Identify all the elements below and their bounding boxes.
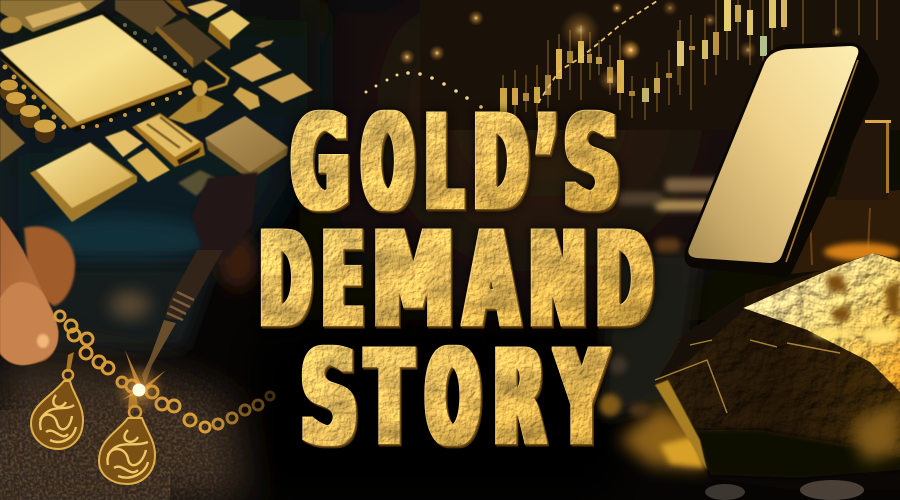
candle wicks — [503, 0, 877, 120]
board surface — [0, 0, 320, 265]
nugget shadow base — [692, 430, 900, 490]
title line: GOLD'S: O — [362, 86, 414, 240]
second finger — [24, 226, 75, 306]
pendant: left — [31, 352, 83, 449]
component: contact pads — [2, 64, 182, 130]
component: small square chips — [105, 130, 170, 182]
background: upper market base — [420, 0, 900, 130]
thumb — [0, 216, 58, 365]
bokeh lights — [399, 0, 843, 92]
workbench base — [0, 410, 170, 500]
component: large lower chip — [30, 142, 137, 222]
title line: GOLD'S: G — [292, 86, 349, 240]
workbench surface — [0, 352, 250, 500]
panel: circuit board — [0, 0, 320, 265]
title line: STORY: S — [301, 322, 358, 474]
title line: STORY: O — [426, 322, 480, 474]
nugget body — [655, 253, 900, 470]
panel: gold nugget — [599, 243, 900, 500]
tool needle — [142, 320, 176, 385]
bar behind lower — [780, 190, 900, 275]
title line: DEMAND: N — [530, 204, 586, 356]
nugget rim glow — [824, 243, 900, 261]
blurred coins — [617, 178, 720, 252]
component: metal square chip — [205, 116, 288, 180]
background: right ground — [600, 250, 700, 420]
ground hot light — [660, 436, 706, 468]
title line: STORY: R — [494, 322, 544, 474]
main bar side — [684, 43, 879, 277]
tool ribbed collar — [167, 292, 194, 320]
title line: GOLD'S: L — [426, 86, 462, 240]
candle bodies — [500, 0, 787, 112]
icon: solder spark — [113, 350, 166, 415]
nugget cracks — [655, 340, 840, 413]
ground blurred stones — [599, 356, 651, 417]
title line: DEMAND: A — [465, 204, 518, 356]
main bar lit edge — [786, 60, 858, 262]
title line: STORY: Y — [556, 322, 607, 474]
component: heat sinks — [115, 0, 222, 68]
nail highlight — [37, 334, 49, 348]
background: foreground darkening under title — [250, 330, 620, 500]
bar behind lit edges — [810, 120, 891, 265]
component: upper pads row — [123, 23, 187, 73]
pendant: right — [99, 392, 155, 484]
nugget dark crevices — [826, 274, 900, 322]
chart: candlestick market — [364, 0, 877, 120]
nugget left dark shoulder — [656, 295, 745, 382]
title line: DEMAND: E — [323, 204, 363, 356]
text mark on board — [178, 170, 216, 196]
component: gold cubes — [165, 0, 250, 50]
blurred warm reflection — [110, 291, 150, 319]
component: crystal oscillator — [132, 113, 205, 167]
trend line rising — [538, 1, 657, 103]
component: top left connector — [0, 0, 105, 33]
workbench grit — [0, 377, 240, 500]
title line: DEMAND: D — [260, 204, 311, 356]
component: right flat chips — [230, 40, 313, 110]
workbench backdrop — [0, 265, 215, 350]
nugget hot highlights — [813, 327, 898, 343]
tool upper body — [192, 172, 258, 258]
title line: GOLD'S: D — [474, 86, 528, 240]
main bar face — [688, 46, 858, 263]
title line: GOLD'S: ’ — [537, 86, 557, 240]
icon: hand fingers — [0, 216, 75, 365]
panel: jewellery workbench — [0, 172, 290, 500]
right hand blurred skin — [218, 236, 258, 288]
component: gold trace and post — [168, 60, 228, 124]
ground glow — [620, 405, 707, 470]
background: warm market glow — [300, 0, 900, 320]
component: main gold processor — [0, 12, 196, 132]
panel: gold bars — [617, 43, 900, 277]
icon: soldering tool — [142, 172, 258, 385]
title line: GOLD'S: S — [564, 86, 620, 240]
title: GOLD'S DEMAND STORY — [260, 86, 653, 474]
trend line dots — [364, 71, 483, 109]
title line: DEMAND: M — [373, 204, 454, 356]
teal board glow — [30, 216, 210, 264]
bar behind upper — [835, 118, 890, 200]
tool handle — [165, 250, 223, 320]
component: left block — [0, 118, 25, 162]
title line: DEMAND: D — [596, 204, 653, 356]
title line: STORY: T — [367, 322, 412, 474]
necklace chain — [55, 311, 274, 432]
nugget lower gold glitter — [850, 405, 900, 462]
board base — [0, 0, 240, 230]
rocks foreground — [705, 480, 864, 500]
nugget left edge lit — [655, 380, 707, 470]
component: round capacitors — [0, 80, 56, 143]
nugget lit top — [743, 253, 900, 392]
nugget lower shadow — [692, 430, 900, 478]
thumbnail — [0, 282, 58, 365]
